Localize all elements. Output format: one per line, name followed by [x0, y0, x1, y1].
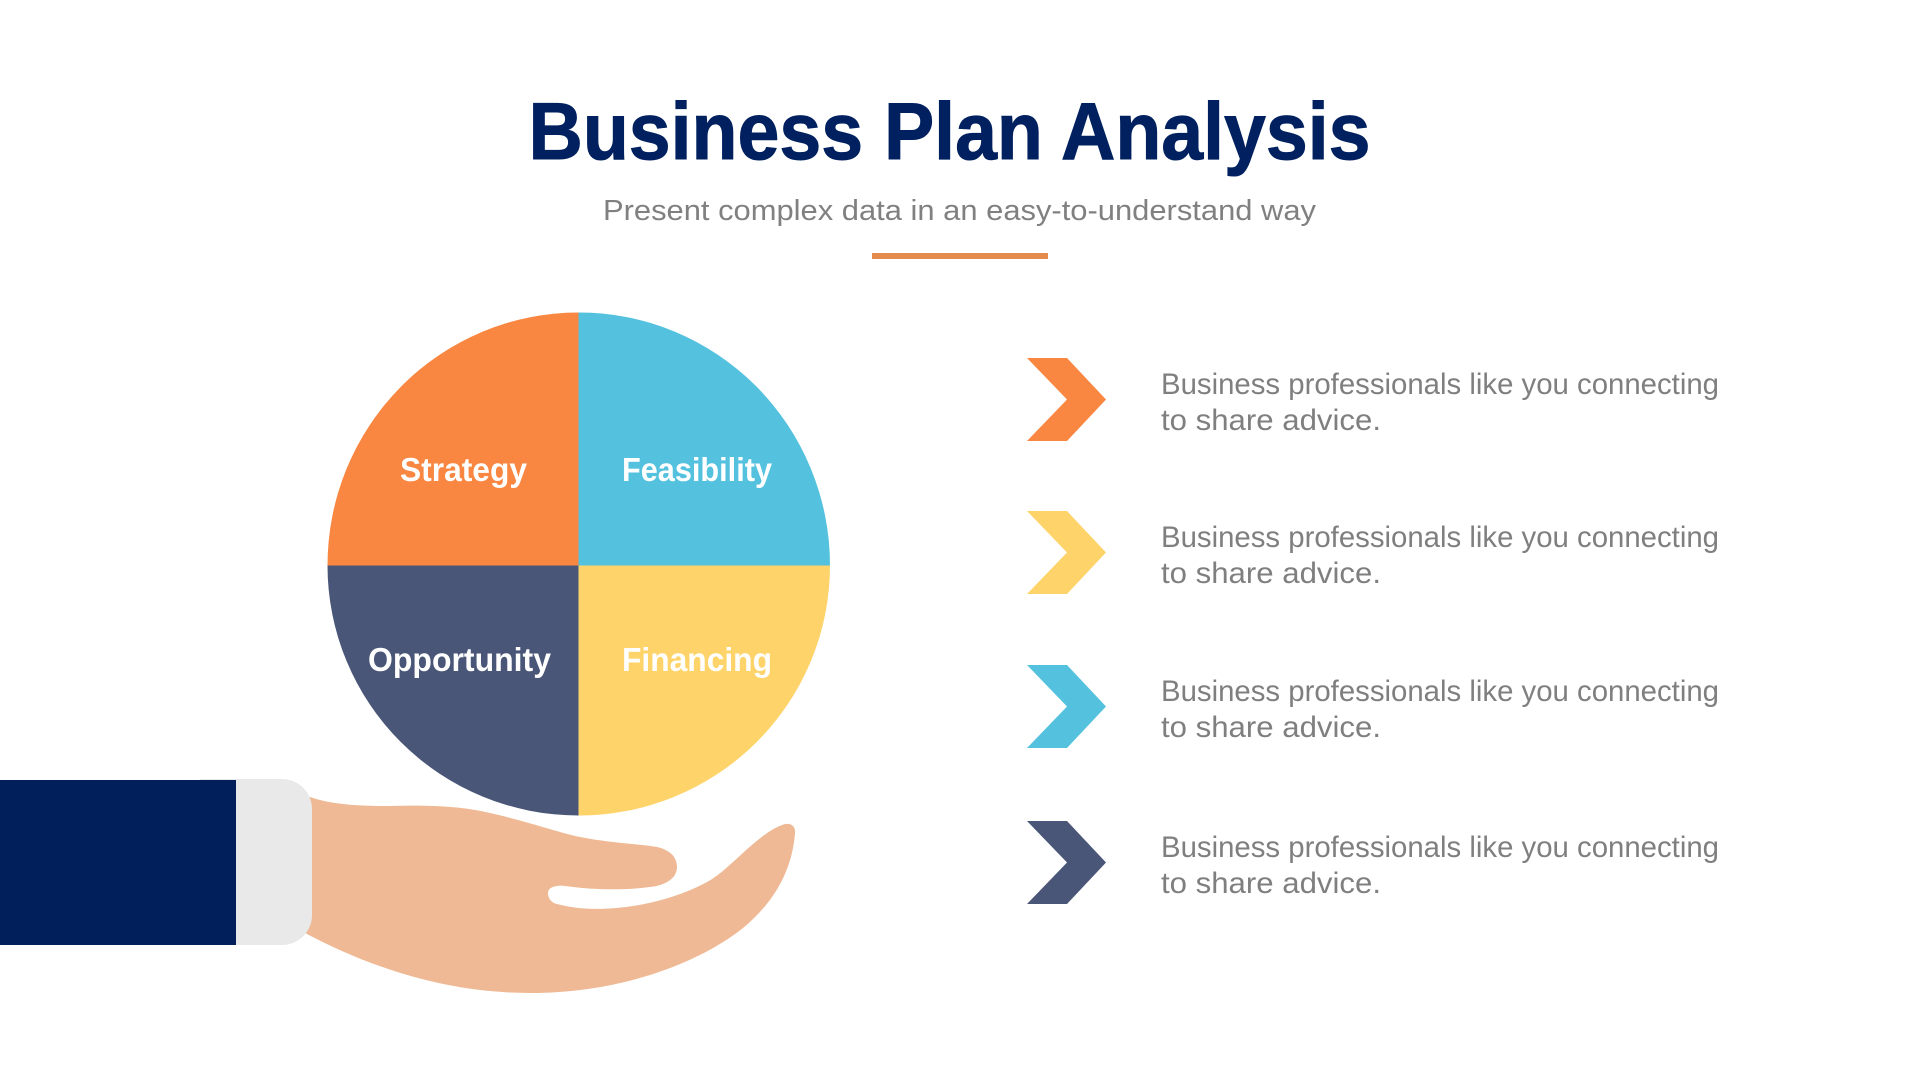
segment: Financing: Financing — [622, 641, 772, 678]
segment: Financing — [578, 566, 830, 816]
title: Business Plan Analysis — [528, 87, 1370, 177]
segment: Opportunity — [328, 566, 578, 816]
icon: hand holding pie — [0, 779, 795, 993]
list item 4 — [1027, 821, 1719, 904]
text block 3: Business professionals like you connecting — [1161, 675, 1719, 708]
segment: Feasibility: Feasibility — [622, 451, 773, 488]
cuff — [200, 779, 312, 945]
text block 2: Business professionals like you connecting — [1161, 521, 1719, 554]
pie chart — [328, 312, 830, 816]
list item 2 — [1027, 511, 1719, 594]
chevron: yellow — [1027, 511, 1106, 594]
text block 4: Business professionals like you connecting — [1161, 831, 1719, 864]
title underline — [872, 253, 1048, 259]
segment: Feasibility — [578, 312, 830, 566]
list item 3 — [1027, 665, 1719, 748]
list item 1 — [1027, 358, 1719, 441]
chevron: orange — [1027, 358, 1106, 441]
text block 1: to share advice. — [1161, 404, 1381, 437]
text block 2: to share advice. — [1161, 557, 1381, 590]
chevron: blue — [1027, 665, 1106, 748]
chevron: navy — [1027, 821, 1106, 904]
subtitle: Present complex data in an easy-to-understand way — [603, 195, 1317, 227]
text block 1: Business professionals like you connecting — [1161, 368, 1719, 401]
text block 4: to share advice. — [1161, 867, 1381, 900]
segment: Opportunity: Opportunity — [368, 641, 552, 678]
text block 3: to share advice. — [1161, 711, 1381, 744]
segment: Strategy — [328, 312, 578, 566]
segment: Strategy: Strategy — [400, 451, 528, 488]
sleeve — [0, 780, 236, 945]
palm — [295, 794, 795, 993]
